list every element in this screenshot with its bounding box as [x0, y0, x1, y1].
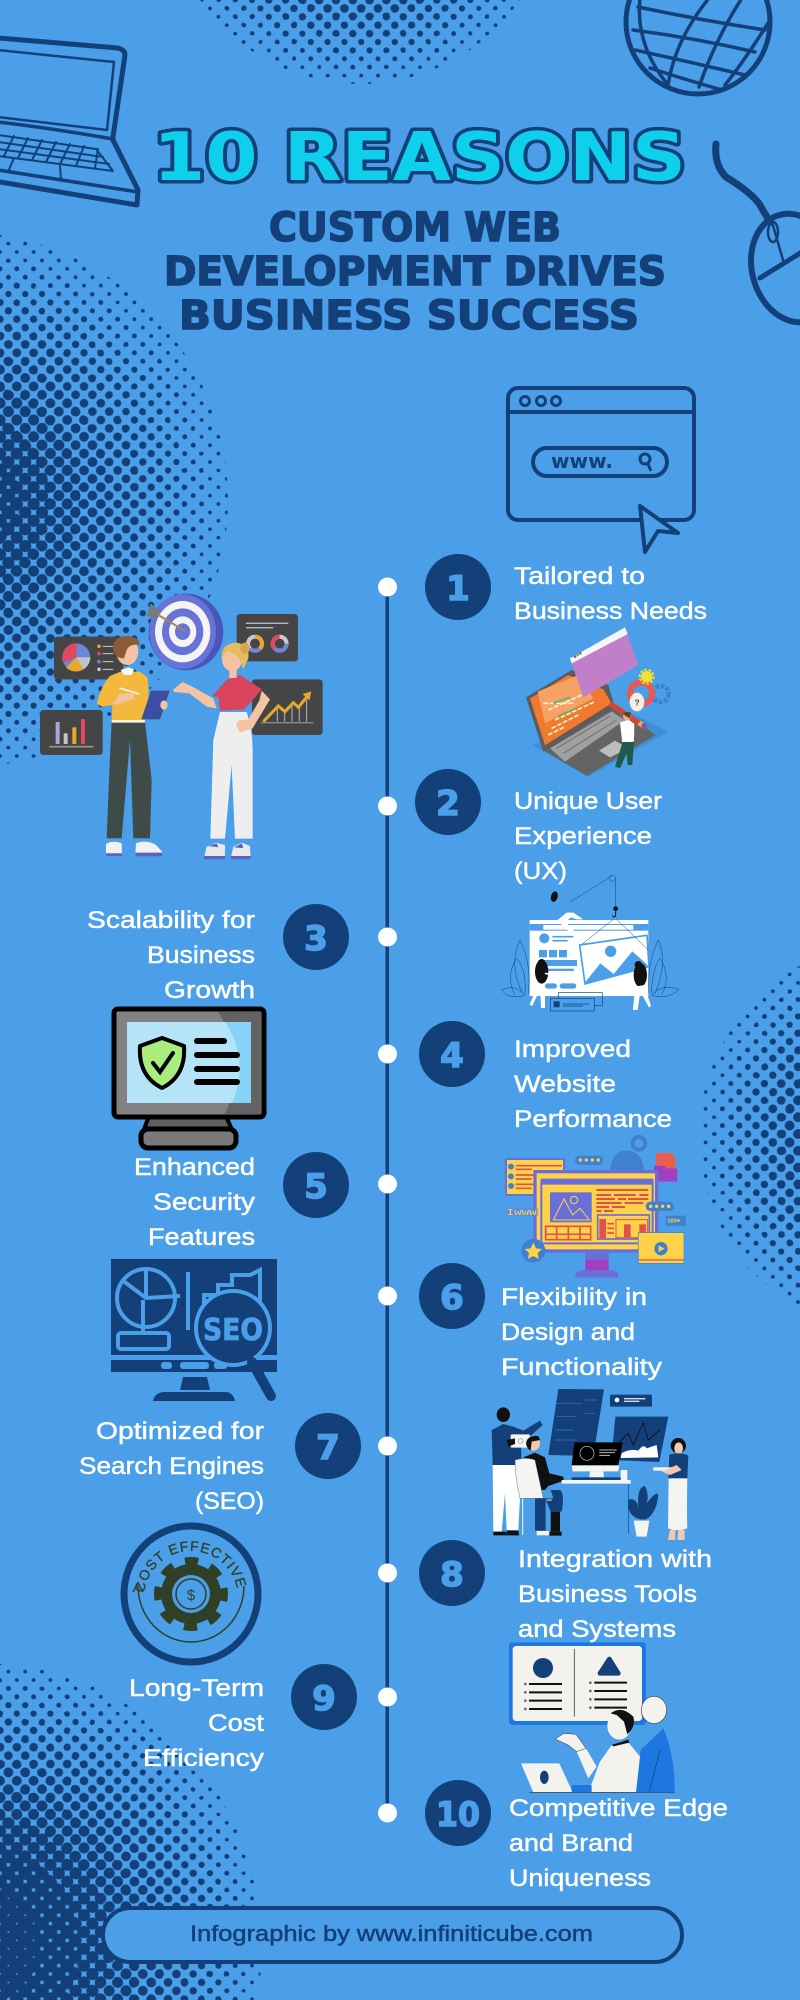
illustration: SEO monitor with magnifier: SEO: [203, 1313, 263, 1348]
number badge 5: [283, 1152, 349, 1218]
number badge 8: [419, 1540, 485, 1606]
illustration: yellow web design screens: [506, 1137, 686, 1278]
halftone: right: [699, 941, 800, 1333]
footer credit pill: Infographic by www.infiniticube.com: [190, 1921, 593, 1946]
number badge 5: 5: [304, 1167, 328, 1207]
label 1: Business Needs: [514, 598, 707, 625]
label 10: [509, 1795, 728, 1892]
label 3: Growth: [164, 977, 255, 1004]
label 4: Performance: [514, 1106, 672, 1133]
label 9: Long-Term: [129, 1675, 264, 1702]
label 9: Cost: [208, 1710, 264, 1737]
number badge 9: 9: [312, 1679, 336, 1719]
footer credit pill: [103, 1908, 682, 1962]
icon: cost effective badge: [120, 1522, 262, 1666]
icon: computer mouse: [716, 144, 800, 332]
label 9: Efficiency: [143, 1745, 265, 1772]
subtitle: [164, 205, 666, 339]
label 3: Business: [147, 942, 255, 969]
label 2: (UX): [514, 858, 567, 885]
icon: globe: [626, 0, 770, 94]
illustration: laptop with code: [526, 627, 669, 777]
label 6: Flexibility in: [501, 1284, 647, 1311]
illustration: laptop with code: ?: [634, 697, 640, 707]
label 8: and Systems: [518, 1616, 676, 1643]
label 8: Integration with: [518, 1546, 712, 1573]
halftone: bottom left: [0, 1663, 262, 2000]
label 5: [134, 1154, 256, 1251]
number badge 2: [415, 769, 481, 835]
step 10: Competitive Edge and Brand Uniqueness: [425, 1780, 728, 1892]
label 7: (SEO): [195, 1488, 264, 1515]
step 1: Tailored to Business Needs: [425, 554, 707, 625]
label 5: Features: [148, 1224, 255, 1251]
icon: laptop outline: [0, 38, 138, 205]
label 10: Competitive Edge: [509, 1795, 728, 1822]
subtitle: BUSINESS SUCCESS: [179, 293, 639, 339]
label 4: Improved: [514, 1036, 631, 1063]
halftone: top centre: [166, 0, 554, 84]
halftone: upper left: [0, 232, 228, 768]
icon: browser window with www search: [508, 388, 694, 552]
illustration: monitor with security shield: [114, 1009, 264, 1148]
label 6: Design and: [501, 1319, 635, 1346]
timeline axis: [378, 578, 397, 1822]
label 2: Experience: [514, 823, 652, 850]
label 9: [129, 1675, 265, 1772]
label 5: Enhanced: [134, 1154, 255, 1181]
number badge 7: [295, 1413, 361, 1479]
step 4: Improved Website Performance: [419, 1021, 672, 1133]
number badge 3: [283, 904, 349, 970]
step 5: Enhanced Security Features: [134, 1152, 349, 1251]
number badge 9: [291, 1664, 357, 1730]
label 7: Optimized for: [96, 1418, 264, 1445]
step 3: Scalability for Business Growth: [87, 904, 349, 1004]
label 8: Business Tools: [518, 1581, 697, 1608]
number badge 1: 1: [446, 569, 470, 609]
label 3: [87, 907, 255, 1004]
number badge 10: [425, 1780, 491, 1846]
step 8: Integration with Business Tools and Systems: [419, 1540, 712, 1643]
icon: cost effective badge: $: [187, 1587, 196, 1604]
step 6: Flexibility in Design and Functionality: [419, 1263, 663, 1381]
label 4: Website: [514, 1071, 616, 1098]
label 6: [501, 1284, 663, 1381]
label 5: Security: [153, 1189, 256, 1216]
label 2: Unique User: [514, 788, 662, 815]
illustration: yellow web design screens: Iwww: [507, 1207, 537, 1218]
label 10: Uniqueness: [509, 1865, 651, 1892]
illustration: UX designers placing an image on a web page: [502, 875, 679, 1011]
title: 10 REASONS: [153, 118, 686, 196]
label 1: [514, 563, 707, 625]
icon: browser window with www search: www.: [551, 449, 613, 473]
label 7: Search Engines: [79, 1453, 264, 1480]
illustration: business team with target and charts: [40, 594, 323, 859]
subtitle: CUSTOM WEB: [269, 205, 561, 251]
number badge 8: 8: [440, 1555, 464, 1595]
label 3: Scalability for: [87, 907, 255, 934]
number badge 4: [419, 1021, 485, 1087]
label 4: [514, 1036, 672, 1133]
label 8: [518, 1546, 712, 1643]
step 9: Long-Term Cost Efficiency: [129, 1664, 357, 1772]
icon: cost effective badge: COST EFFECTIVE: [135, 1541, 246, 1592]
number badge 7: 7: [316, 1428, 340, 1468]
step 7: Optimized for Search Engines: [79, 1413, 361, 1515]
number badge 10: 10: [436, 1795, 480, 1835]
illustration: team at computer desk: [492, 1389, 688, 1540]
number badge 4: 4: [440, 1036, 464, 1076]
label 7: [79, 1418, 264, 1515]
label 6: Functionality: [501, 1354, 663, 1381]
number badge 1: [425, 554, 491, 620]
number badge 6: [419, 1263, 485, 1329]
number badge 6: 6: [440, 1278, 464, 1318]
subtitle: DEVELOPMENT DRIVES: [164, 249, 666, 295]
illustration: presenters at board: [509, 1642, 675, 1792]
number badge 2: 2: [436, 784, 460, 824]
illustration: SEO monitor with magnifier: [111, 1259, 277, 1401]
illustration: yellow web design screens: 100♥: [667, 1219, 681, 1225]
step 2: Unique User Experience: [415, 769, 662, 885]
number badge 3: 3: [304, 919, 328, 959]
label 2: [514, 788, 662, 885]
label 10: and Brand: [509, 1830, 633, 1857]
label 1: Tailored to: [514, 563, 645, 590]
